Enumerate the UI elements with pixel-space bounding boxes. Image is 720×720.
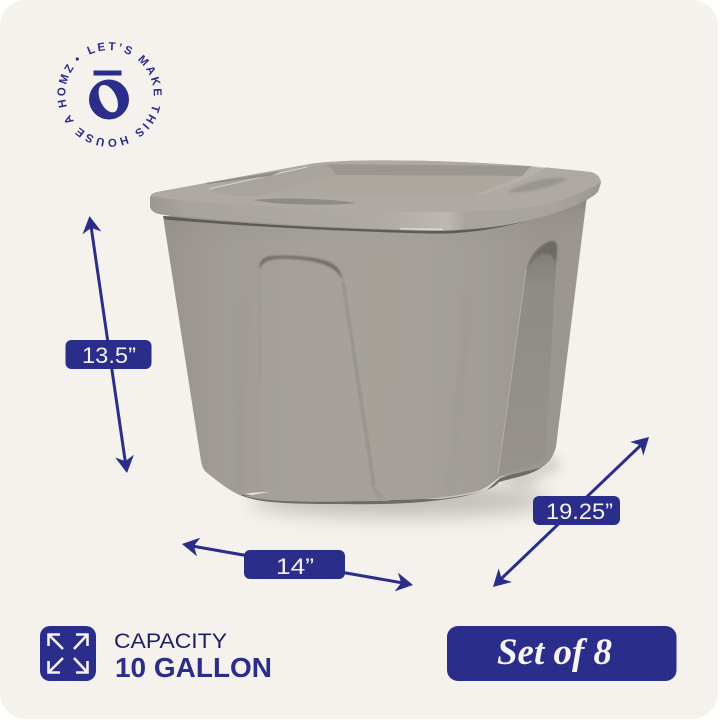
arrow: [80, 215, 136, 474]
rim highlight: [400, 228, 443, 230]
body top shadow: [163, 196, 587, 500]
label text: 14”: [276, 554, 314, 579]
lid recess right wing: [473, 166, 545, 196]
logo bar: [94, 70, 122, 76]
lid: [150, 160, 601, 234]
lid recess floor: [258, 175, 522, 196]
lid slot back: [205, 171, 282, 184]
logo separator dot: [76, 57, 79, 61]
label pill: [66, 340, 152, 369]
logo letter o: [89, 79, 129, 120]
capacity value: 10 GALLON: [115, 652, 272, 683]
capacity block: [40, 626, 272, 683]
right handle recess: [498, 241, 557, 476]
lid recess back wall: [327, 164, 531, 176]
icon: expand arrows: [40, 626, 96, 681]
badge text: Set of 8: [497, 632, 612, 673]
lid highlight: [209, 166, 545, 189]
label text: 19.25”: [546, 499, 613, 524]
lid slot right: [507, 178, 568, 192]
label pill: [244, 550, 345, 579]
base foot: [238, 462, 548, 504]
lid recess left wing: [209, 164, 337, 196]
arrow: [486, 430, 656, 594]
label pill: [533, 496, 620, 525]
tote body: [163, 196, 587, 500]
circular tagline: LET’S MAKE THIS HOUSE A HOMZ: [57, 42, 162, 147]
arrow: [180, 535, 415, 594]
product: storage tote: [150, 160, 601, 517]
body facets: [236, 290, 472, 499]
dimension: width 14 inches: [180, 535, 415, 594]
badge background: [447, 626, 676, 681]
dimension: depth 19.25 inches: [486, 430, 656, 594]
capacity label: CAPACITY: [114, 629, 227, 653]
brand logo badge: [57, 42, 162, 147]
seam under lid: [163, 198, 587, 234]
lid top surface: [151, 160, 601, 212]
left handle recess: [258, 256, 376, 494]
dimension: height 13.5 inches: [66, 215, 152, 474]
floor shadow: [250, 483, 550, 517]
lid slot front: [253, 199, 356, 205]
lid rim: [150, 160, 601, 230]
set of 8 badge: [447, 626, 676, 681]
label text: 13.5”: [82, 343, 136, 368]
